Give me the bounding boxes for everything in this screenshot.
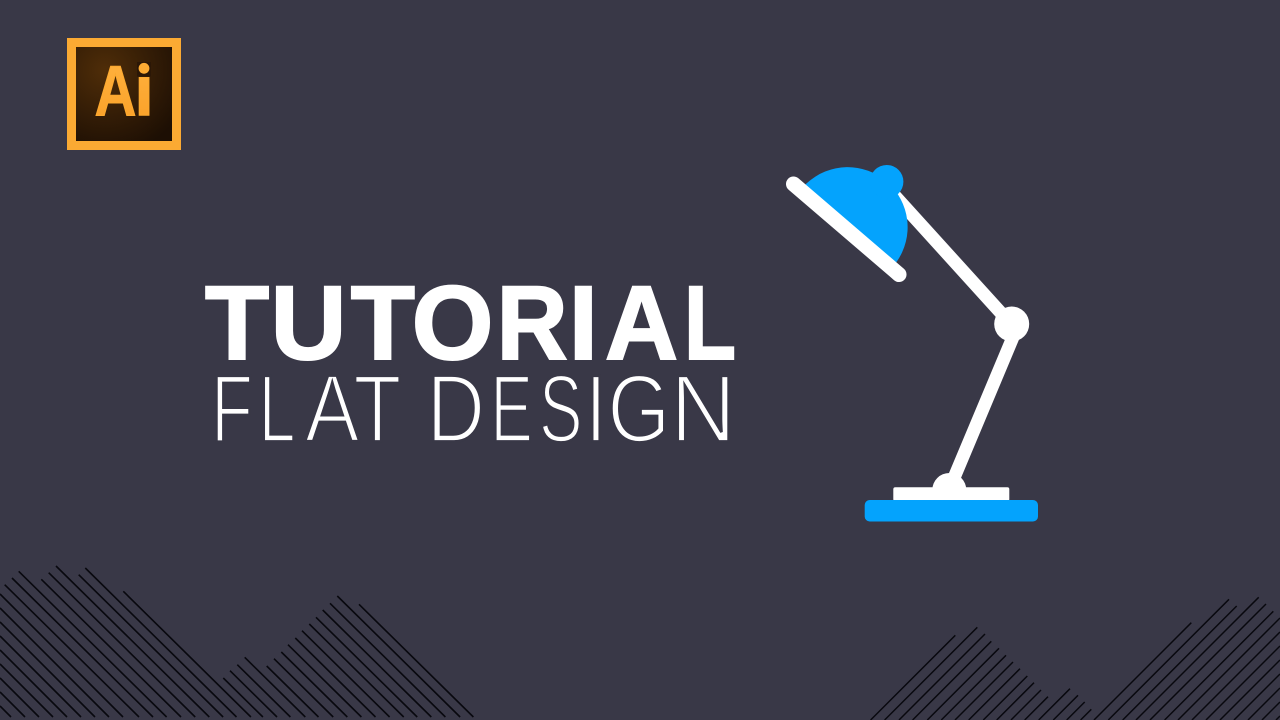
logo frame	[67, 38, 181, 150]
illustration: desk lamp	[794, 165, 1038, 522]
hatched mountains: right	[871, 597, 1280, 720]
logo i-dot	[139, 63, 149, 74]
logo letters: i	[134, 53, 154, 132]
subtitle: L	[259, 355, 295, 462]
lamp upper arm	[885, 185, 1011, 324]
lamp base pivot	[932, 473, 966, 507]
subtitle: S	[539, 355, 582, 462]
subtitle: D	[427, 355, 485, 462]
subtitle: T	[354, 355, 400, 462]
lamp base foot	[865, 500, 1038, 522]
lamp shade dome	[800, 167, 908, 265]
lamp base plate	[893, 487, 1009, 501]
subtitle: A	[305, 355, 359, 462]
title: I	[569, 265, 598, 382]
title: A	[605, 265, 678, 382]
logo i-dot cover	[137, 62, 151, 76]
subtitle: F	[211, 355, 253, 462]
logo inner square	[76, 47, 172, 141]
subtitle: I	[585, 355, 607, 462]
subtitle: G	[608, 355, 670, 462]
logo letters: A	[94, 53, 136, 132]
title: R	[497, 265, 568, 382]
lamp shade rim	[794, 184, 899, 274]
lamp elbow joint	[994, 306, 1029, 342]
hatched mountains: left	[0, 566, 473, 717]
lamp shade knob	[870, 165, 903, 198]
lamp lower arm	[951, 330, 1016, 485]
title: T	[351, 265, 415, 382]
subtitle: E	[490, 355, 533, 462]
title: L	[684, 265, 736, 382]
title: T	[205, 265, 269, 382]
title: U	[271, 265, 346, 382]
subtitle: N	[670, 355, 736, 462]
icon: Adobe Illustrator logo	[67, 38, 181, 150]
title: O	[412, 265, 493, 382]
